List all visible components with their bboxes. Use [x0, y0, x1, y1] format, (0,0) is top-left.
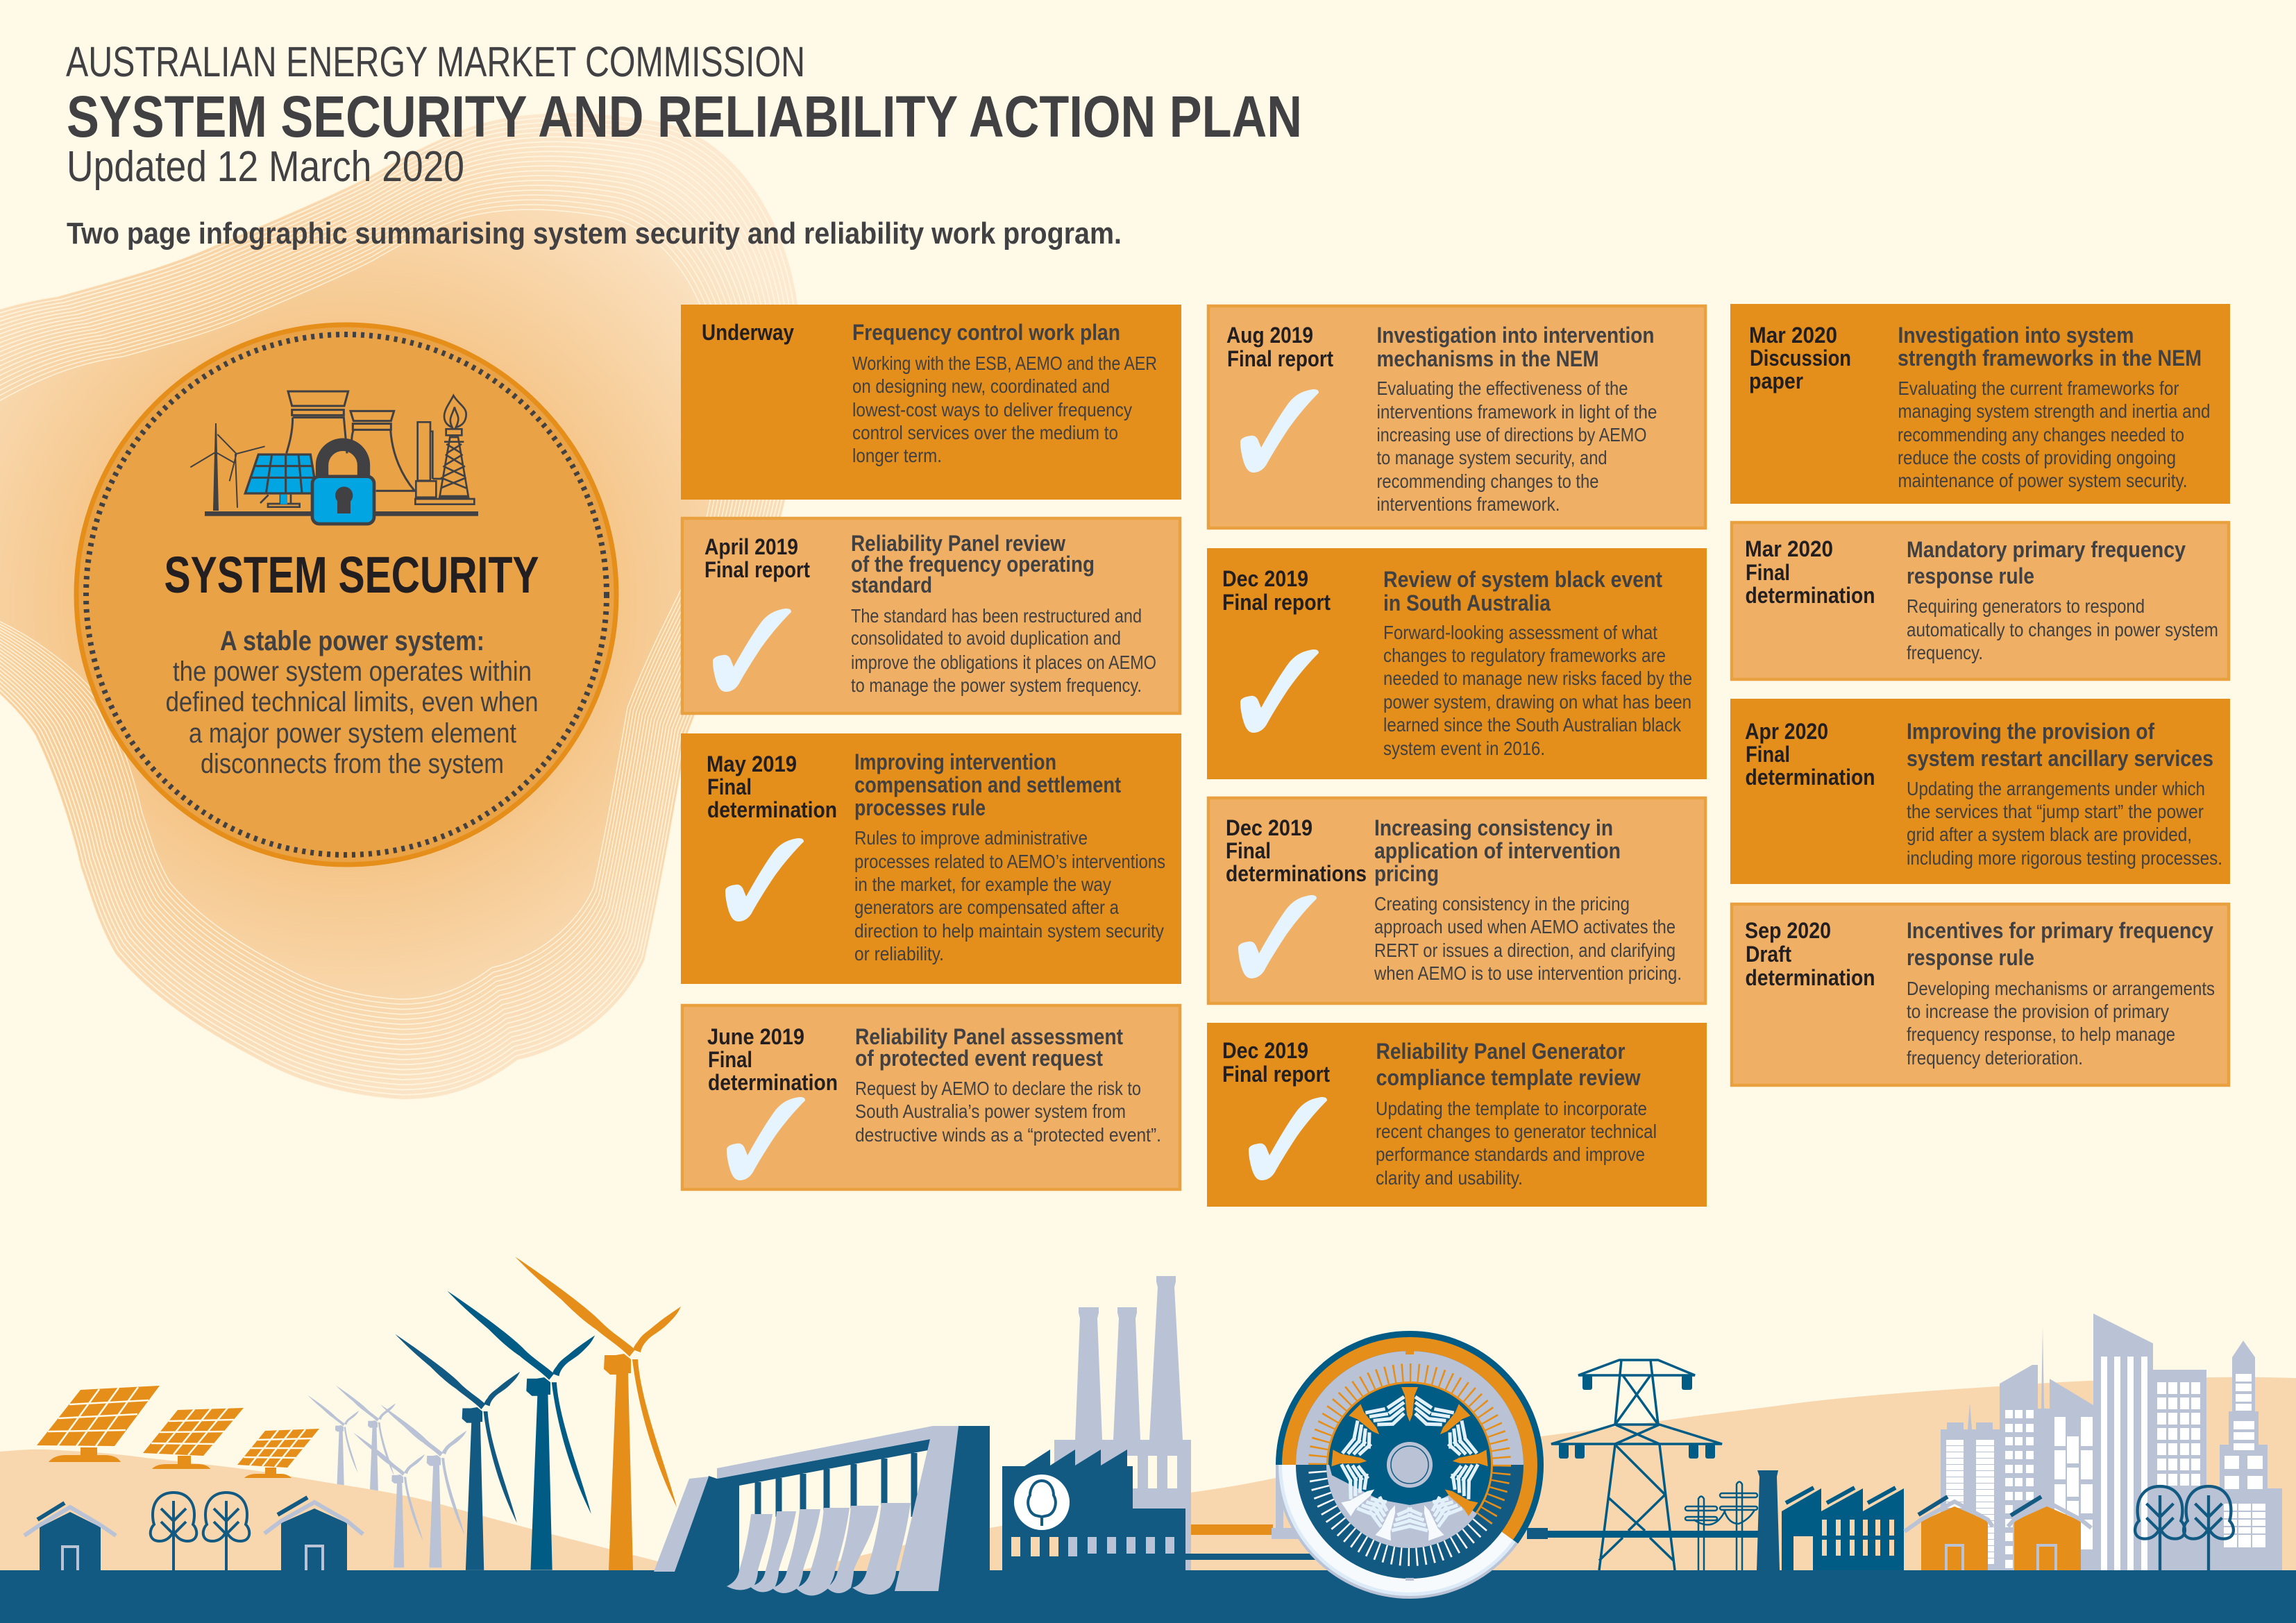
card: reliability panel assessment of protected event request: destructive winds as a “protected event”.	[855, 1124, 1161, 1146]
card: frequency control work plan: control services over the medium to	[852, 422, 1118, 443]
card: review of system black event: Review of system black event	[1383, 567, 1662, 592]
card: incentives for primary frequency response rule: frequency response, to help manage	[1907, 1023, 2175, 1045]
right hill	[784, 1377, 2296, 1572]
card: reliability panel assessment of protected event request: South Australia’s power system from	[855, 1101, 1126, 1122]
card: investigation into system strength frameworks: strength frameworks in the NEM	[1898, 346, 2202, 371]
card: improving provision of system restart ancillary services: Apr 2020	[1745, 719, 1828, 744]
left hill	[0, 1450, 684, 1570]
card: incentives for primary frequency response rule: determination	[1745, 965, 1875, 990]
card: improving provision of system restart ancillary services: grid after a system black are provided,	[1907, 824, 2192, 845]
hydro dam	[654, 1426, 990, 1596]
icon: tick	[727, 1097, 805, 1180]
seal heading: SYSTEM SECURITY	[164, 546, 539, 604]
card: review of system black event	[1207, 548, 1707, 779]
card: increasing consistency in application of intervention pricing: pricing	[1374, 861, 1439, 886]
card: incentives for primary frequency response rule: response rule	[1907, 945, 2034, 970]
card: investigation into intervention mechanisms: interventions framework.	[1377, 493, 1560, 515]
card: increasing consistency in application of intervention pricing: determinations	[1226, 861, 1367, 886]
card: improving intervention compensation and settlement: generators are compensated after a	[854, 897, 1119, 918]
card: improving provision of system restart ancillary services: Updating the arrangements under which	[1907, 778, 2205, 799]
icon: tick	[713, 609, 791, 692]
card: reliability panel generator compliance template review: Reliability Panel Generator	[1376, 1039, 1626, 1064]
card: improving intervention compensation and settlement: or reliability.	[854, 943, 944, 965]
card: investigation into system strength frameworks: Evaluating the current frameworks for	[1898, 377, 2179, 399]
card: reliability panel review of frequency operating standard: Reliability Panel review	[851, 531, 1065, 556]
card: improving provision of system restart ancillary services: system restart ancillary services	[1907, 746, 2213, 771]
card: investigation into system strength frameworks: Investigation into system	[1898, 323, 2134, 348]
main title: SYSTEM SECURITY AND RELIABILITY ACTION PLAN	[67, 84, 1302, 149]
card: frequency control work plan: Working with the ESB, AEMO and the AER	[852, 352, 1157, 374]
card: reliability panel review of frequency operating standard: to manage the power system frequency.	[851, 674, 1142, 696]
card: reliability panel assessment of protected event request: determination	[708, 1070, 838, 1095]
card: reliability panel generator compliance template review: Updating the template to incorporate	[1376, 1098, 1647, 1119]
card: investigation into system strength frameworks: Mar 2020	[1749, 323, 1837, 348]
card: reliability panel generator compliance template review: clarity and usability.	[1376, 1167, 1523, 1189]
card: improving intervention compensation and settlement: determination	[707, 797, 837, 822]
icon: tick	[1249, 1097, 1327, 1180]
card: incentives for primary frequency response rule	[1732, 904, 2229, 1085]
card: increasing consistency in application of intervention pricing: Final	[1226, 838, 1271, 863]
card: improving provision of system restart ancillary services: Improving the provision of	[1907, 719, 2154, 744]
card: increasing consistency in application of intervention pricing: approach used when AEMO activates the	[1374, 916, 1675, 937]
solar trackers	[37, 1386, 319, 1478]
card: improving provision of system restart ancillary services: the services that “jump start” the power	[1907, 801, 2204, 822]
card: investigation into system strength frameworks: maintenance of power system security.	[1898, 470, 2188, 491]
card: review of system black event: system event in 2016.	[1383, 738, 1545, 759]
distant factory with rooftop solar	[1757, 1470, 1904, 1570]
card: increasing consistency in application of intervention pricing: when AEMO is to use intervention pricing.	[1374, 962, 1682, 984]
card: incentives for primary frequency response rule: to increase the provision of primary	[1907, 1001, 2169, 1022]
card: frequency control work plan: on designing new, coordinated and	[852, 375, 1110, 397]
card: mandatory primary frequency response rule: automatically to changes in power system	[1907, 619, 2218, 640]
card: reliability panel assessment of protected event request: Request by AEMO to declare the risk to	[855, 1078, 1141, 1099]
card: incentives for primary frequency response rule: Sep 2020	[1745, 918, 1831, 943]
card: investigation into system strength frameworks: managing system strength and inertia and	[1898, 400, 2210, 422]
card: mandatory primary frequency response rule: Mar 2020	[1745, 536, 1833, 561]
seal description: defined technical limits, even when	[166, 687, 539, 717]
card: investigation into intervention mechanisms: Evaluating the effectiveness of the	[1377, 377, 1628, 399]
card: review of system black event: Final report	[1222, 590, 1331, 615]
card: frequency control work plan: Underway	[702, 320, 794, 345]
card: reliability panel generator compliance template review: Dec 2019	[1222, 1038, 1308, 1063]
card: increasing consistency in application of intervention pricing: RERT or issues a direction, and clarifying	[1374, 940, 1675, 961]
card: reliability panel review of frequency operating standard: improve the obligations it places on AEMO	[851, 652, 1156, 673]
card: incentives for primary frequency response rule: Incentives for primary frequency	[1907, 918, 2213, 943]
card: increasing consistency in application of intervention pricing	[1208, 798, 1705, 1003]
card: improving intervention compensation and settlement: Improving intervention	[854, 749, 1056, 774]
card: increasing consistency in application of intervention pricing: Creating consistency in the pricing	[1374, 893, 1630, 915]
card: improving provision of system restart ancillary services: including more rigorous testing processes.	[1907, 847, 2222, 869]
card: improving intervention compensation and settlement: Rules to improve administrative	[854, 827, 1088, 849]
card: improving intervention compensation and settlement: May 2019	[707, 751, 797, 776]
card: reliability panel generator compliance template review: recent changes to generator technical	[1376, 1121, 1657, 1142]
icon: tick	[725, 838, 804, 921]
card: improving intervention compensation and settlement	[681, 733, 1181, 984]
card: mandatory primary frequency response rule: Mandatory primary frequency	[1907, 537, 2186, 562]
distant grey wind turbines	[307, 1386, 396, 1498]
card: review of system black event: power system, drawing on what has been	[1383, 691, 1691, 713]
card: reliability panel review of frequency operating standard: consolidated to avoid duplication and	[851, 627, 1121, 649]
card: reliability panel generator compliance template review: Final report	[1222, 1062, 1330, 1087]
card: investigation into system strength frameworks: Discussion	[1750, 346, 1851, 371]
card: mandatory primary frequency response rule: response rule	[1907, 563, 2034, 588]
card: reliability panel assessment of protected event request: Reliability Panel assessment	[855, 1024, 1123, 1049]
icon: energy assets with padlock	[190, 391, 478, 524]
card: review of system black event: learned since the South Australian black	[1383, 714, 1682, 736]
card: improving provision of system restart ancillary services: Final	[1746, 742, 1790, 767]
icon: tick	[1238, 895, 1317, 978]
card: reliability panel generator compliance template review: compliance template review	[1376, 1065, 1641, 1090]
card: mandatory primary frequency response rule: Final	[1746, 560, 1790, 585]
card: reliability panel assessment of protected event request: of protected event request	[855, 1046, 1103, 1071]
card: investigation into intervention mechanisms: interventions framework in light of the	[1377, 401, 1657, 423]
card: mandatory primary frequency response rule: determination	[1745, 583, 1875, 608]
card: investigation into system strength frameworks: reduce the costs of providing ongoing	[1898, 447, 2176, 468]
landscape illustration	[0, 1257, 2296, 1623]
transmission line and pylon	[1548, 1360, 1760, 1570]
card: frequency control work plan: longer term.	[852, 445, 942, 466]
card: frequency control work plan: Frequency control work plan	[852, 320, 1120, 345]
card: incentives for primary frequency response rule: Developing mechanisms or arrangements	[1907, 978, 2215, 999]
seal description: the power system operates within	[173, 656, 532, 687]
card: improving intervention compensation and settlement: compensation and settlement	[854, 772, 1121, 797]
card: investigation into intervention mechanisms: Investigation into intervention	[1377, 323, 1655, 348]
card: reliability panel generator compliance template review: performance standards and improve	[1376, 1144, 1645, 1165]
houses and trees, right	[1905, 1486, 2234, 1570]
card: investigation into system strength frameworks: recommending any changes needed to	[1898, 424, 2184, 445]
wind turbines	[380, 1404, 466, 1567]
seal description: a major power system element	[189, 718, 516, 749]
ground band	[0, 1570, 2296, 1623]
card: improving provision of system restart ancillary services: determination	[1745, 765, 1875, 790]
card: review of system black event: in South Australia	[1383, 590, 1551, 615]
card: reliability panel review of frequency operating standard	[682, 518, 1180, 713]
card: reliability panel generator compliance template review	[1207, 1023, 1707, 1207]
organisation name: AUSTRALIAN ENERGY MARKET COMMISSION	[66, 38, 805, 85]
card: investigation into intervention mechanisms: increasing use of directions by AEMO	[1377, 424, 1646, 445]
card: increasing consistency in application of intervention pricing: Dec 2019	[1226, 815, 1312, 840]
card: investigation into intervention mechanisms: recommending changes to the	[1377, 470, 1599, 492]
card: reliability panel review of frequency operating standard: of the frequency operating	[851, 552, 1095, 577]
card: reliability panel review of frequency operating standard: April 2019	[704, 534, 798, 559]
seal description: disconnects from the system	[201, 749, 504, 779]
card: reliability panel review of frequency operating standard: The standard has been restructured and	[851, 605, 1142, 627]
card: increasing consistency in application of intervention pricing: application of intervention	[1374, 838, 1621, 863]
icon: tick	[1240, 389, 1319, 473]
card: investigation into intervention mechanisms: mechanisms in the NEM	[1377, 346, 1599, 371]
distribution poles	[1685, 1482, 1757, 1570]
seal description	[166, 626, 539, 779]
header	[66, 38, 1302, 250]
card: investigation into intervention mechanisms: to manage system security, and	[1377, 447, 1607, 468]
card: investigation into intervention mechanisms	[1208, 306, 1705, 528]
card: review of system black event: Dec 2019	[1222, 566, 1308, 591]
card: reliability panel review of frequency operating standard: Final report	[704, 557, 810, 582]
card: increasing consistency in application of intervention pricing: Increasing consistency in	[1374, 815, 1613, 840]
card: incentives for primary frequency response rule: Draft	[1746, 942, 1791, 967]
card: frequency control work plan: lowest-cost ways to deliver frequency	[852, 399, 1132, 420]
card: review of system black event: needed to manage new risks faced by the	[1383, 668, 1692, 689]
card: investigation into intervention mechanisms: Aug 2019	[1226, 323, 1313, 348]
card: review of system black event: Forward-looking assessment of what	[1383, 622, 1657, 643]
city skyline	[1941, 1314, 2282, 1570]
card: reliability panel review of frequency operating standard: standard	[851, 572, 932, 597]
card: reliability panel assessment of protected event request	[682, 1005, 1180, 1189]
card: mandatory primary frequency response rule	[1732, 522, 2229, 679]
card: frequency control work plan	[681, 305, 1181, 500]
card: improving intervention compensation and settlement: in the market, for example the way	[854, 874, 1111, 895]
card: review of system black event: changes to regulatory frameworks are	[1383, 645, 1666, 666]
card: investigation into system strength frameworks: paper	[1749, 368, 1803, 393]
card: mandatory primary frequency response rule: frequency.	[1907, 642, 1983, 663]
coal power station	[1002, 1276, 1315, 1570]
houses and trees, left	[24, 1493, 363, 1570]
card: improving intervention compensation and settlement: direction to help maintain system security	[854, 920, 1164, 942]
card: improving intervention compensation and settlement: Final	[707, 774, 752, 799]
subtitle: Two page infographic summarising system security and reliability work program.	[67, 216, 1122, 250]
card: reliability panel assessment of protected event request: June 2019	[707, 1024, 804, 1049]
card: improving provision of system restart ancillary services	[1730, 699, 2230, 884]
card: investigation into system strength frameworks	[1730, 304, 2230, 504]
card: mandatory primary frequency response rule: Requiring generators to respond	[1907, 595, 2145, 617]
card: reliability panel assessment of protected event request: Final	[708, 1047, 752, 1072]
background swirl behind the seal	[0, 112, 800, 1100]
card: investigation into intervention mechanisms: Final report	[1227, 346, 1333, 371]
system security seal	[76, 325, 616, 865]
date: Updated 12 March 2020	[67, 143, 464, 191]
seal description: A stable power system:	[220, 626, 484, 656]
generator cross-section	[1272, 1331, 1548, 1599]
card: improving intervention compensation and settlement: processes rule	[854, 795, 986, 820]
icon: tick	[1240, 649, 1319, 733]
card: incentives for primary frequency response rule: frequency deterioration.	[1907, 1047, 2083, 1069]
card: improving intervention compensation and settlement: processes related to AEMO’s interventions	[854, 851, 1165, 872]
